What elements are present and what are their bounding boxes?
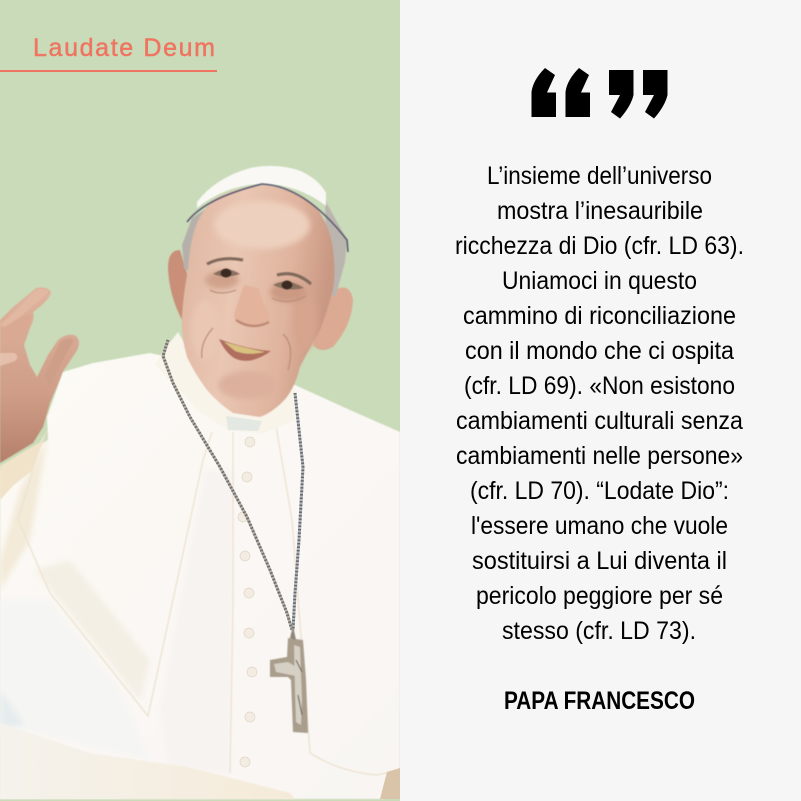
panel: quote background — [400, 0, 801, 801]
heading underline — [0, 70, 217, 72]
quote text: Uniamoci in questo — [502, 267, 697, 295]
quote text: (cfr. LD 69). «Non esistono — [464, 372, 735, 400]
heading: Laudate Deum: Laudate Deum — [33, 34, 215, 62]
quote text: stesso (cfr. LD 73). — [502, 617, 696, 645]
zucchetto — [197, 166, 326, 208]
quote text: L’insieme dell’universo — [487, 162, 712, 190]
eyes — [213, 268, 304, 290]
quote text: l'essere umano che vuole — [471, 512, 728, 540]
eyebrows — [207, 259, 311, 284]
face — [182, 185, 334, 417]
wrinkles — [202, 290, 306, 370]
head — [155, 166, 353, 434]
quote text: (cfr. LD 70). “Lodate Dio”: — [470, 477, 729, 505]
quote text: con il mondo che ci ospita — [465, 337, 734, 365]
photo: Pope Francis — [0, 166, 400, 799]
mouth — [219, 339, 271, 361]
buttons — [238, 437, 257, 767]
belt sash — [0, 723, 295, 799]
chain — [163, 340, 303, 630]
quote text: mostra l’inesauribile — [497, 197, 703, 225]
nose — [234, 285, 269, 327]
cape folds — [18, 420, 400, 775]
neck collar — [155, 332, 295, 434]
face shading — [191, 201, 317, 399]
lower right skin tone — [380, 768, 400, 799]
quote text: pericolo peggiore per sé — [476, 582, 723, 610]
cuff — [0, 430, 47, 500]
collar blue shirt gap — [226, 416, 262, 431]
icon: quotation marks — [532, 68, 668, 118]
hair — [182, 196, 226, 274]
quote text: ricchezza di Dio (cfr. LD 63). — [455, 232, 744, 260]
quote text: cambiamenti nelle persone» — [456, 442, 743, 470]
attribution: PAPA FRANCESCO — [504, 687, 695, 715]
quote text: sostituirsi a Lui diventa il — [472, 547, 727, 575]
panel: green photo background — [0, 0, 400, 801]
quote text: cammino di riconciliazione — [463, 302, 736, 330]
pectoral cross — [270, 626, 308, 733]
ears — [168, 250, 192, 320]
zucchetto edge — [187, 184, 348, 252]
robe shading — [0, 436, 233, 773]
quote text — [455, 162, 744, 645]
raised hand — [0, 288, 79, 463]
white robe — [0, 353, 400, 799]
quote text: cambiamenti culturali senza — [456, 407, 743, 435]
